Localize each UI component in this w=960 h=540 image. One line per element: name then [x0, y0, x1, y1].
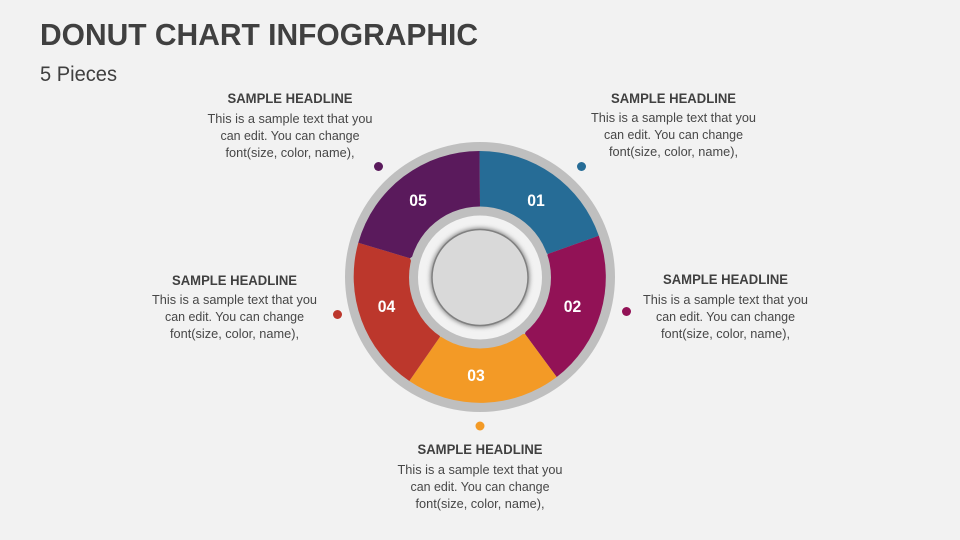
text block: 03 bottom: SAMPLE HEADLINE: [418, 442, 542, 457]
text block: 04 left: SAMPLE HEADLINE: [172, 273, 297, 288]
text block: 02 right: [643, 272, 808, 341]
subtitle: 5 Pieces: [40, 63, 117, 86]
number 04: 04: [378, 298, 396, 316]
dot 03: [476, 422, 484, 430]
dot 01: [577, 162, 586, 171]
title: DONUT CHART INFOGRAPHIC: [40, 18, 478, 52]
text block: 04 left: This is a sample text that you: [152, 293, 317, 307]
dot 05: [374, 162, 383, 171]
number 01: 01: [527, 192, 545, 210]
text block: 01 top right: can edit. You can change: [604, 128, 743, 142]
segment 04: [354, 243, 440, 381]
center circle shadow: [430, 228, 530, 327]
text block: 01 top right: [591, 91, 756, 159]
inner light disc: [418, 216, 542, 340]
text block: 03 bottom: This is a sample text that you: [398, 463, 563, 477]
text block: 02 right: font(size, color, name),: [661, 327, 790, 341]
text block: 02 right: SAMPLE HEADLINE: [663, 272, 788, 287]
text block: 04 left: [152, 273, 317, 341]
text block: 03 bottom: font(size, color, name),: [416, 497, 544, 511]
text block: 05 top left: [208, 91, 373, 160]
number 02: 02: [564, 298, 581, 316]
text block: 03 bottom: can edit. You can change: [410, 480, 550, 494]
text block: 02 right: This is a sample text that you: [643, 293, 808, 307]
text block: 05 top left: font(size, color, name),: [226, 146, 354, 160]
center circle: [432, 230, 528, 326]
segment 03: [409, 334, 557, 403]
donut chart: [345, 142, 615, 412]
text block: 04 left: font(size, color, name),: [170, 327, 299, 341]
number 05: 05: [409, 192, 427, 210]
text block: 05 top left: can edit. You can change: [220, 129, 360, 143]
text block: 01 top right: font(size, color, name),: [609, 145, 738, 159]
inner grey ring: [409, 206, 551, 348]
dot 04: [333, 310, 342, 319]
dot 02: [622, 307, 631, 316]
text block: 01 top right: This is a sample text that you: [591, 111, 756, 125]
text block: 05 top left: This is a sample text that you: [208, 112, 373, 126]
number 03: 03: [467, 367, 485, 385]
text block: 04 left: can edit. You can change: [165, 310, 304, 324]
text block: 02 right: can edit. You can change: [656, 310, 795, 324]
segment 02: [525, 236, 606, 377]
segment 01: [480, 151, 599, 254]
text block: 01 top right: SAMPLE HEADLINE: [611, 91, 736, 106]
outer grey ring: [345, 142, 615, 412]
text block: 05 top left: SAMPLE HEADLINE: [228, 91, 352, 106]
text block: 03 bottom: [398, 442, 563, 511]
segment 05: [358, 151, 480, 258]
